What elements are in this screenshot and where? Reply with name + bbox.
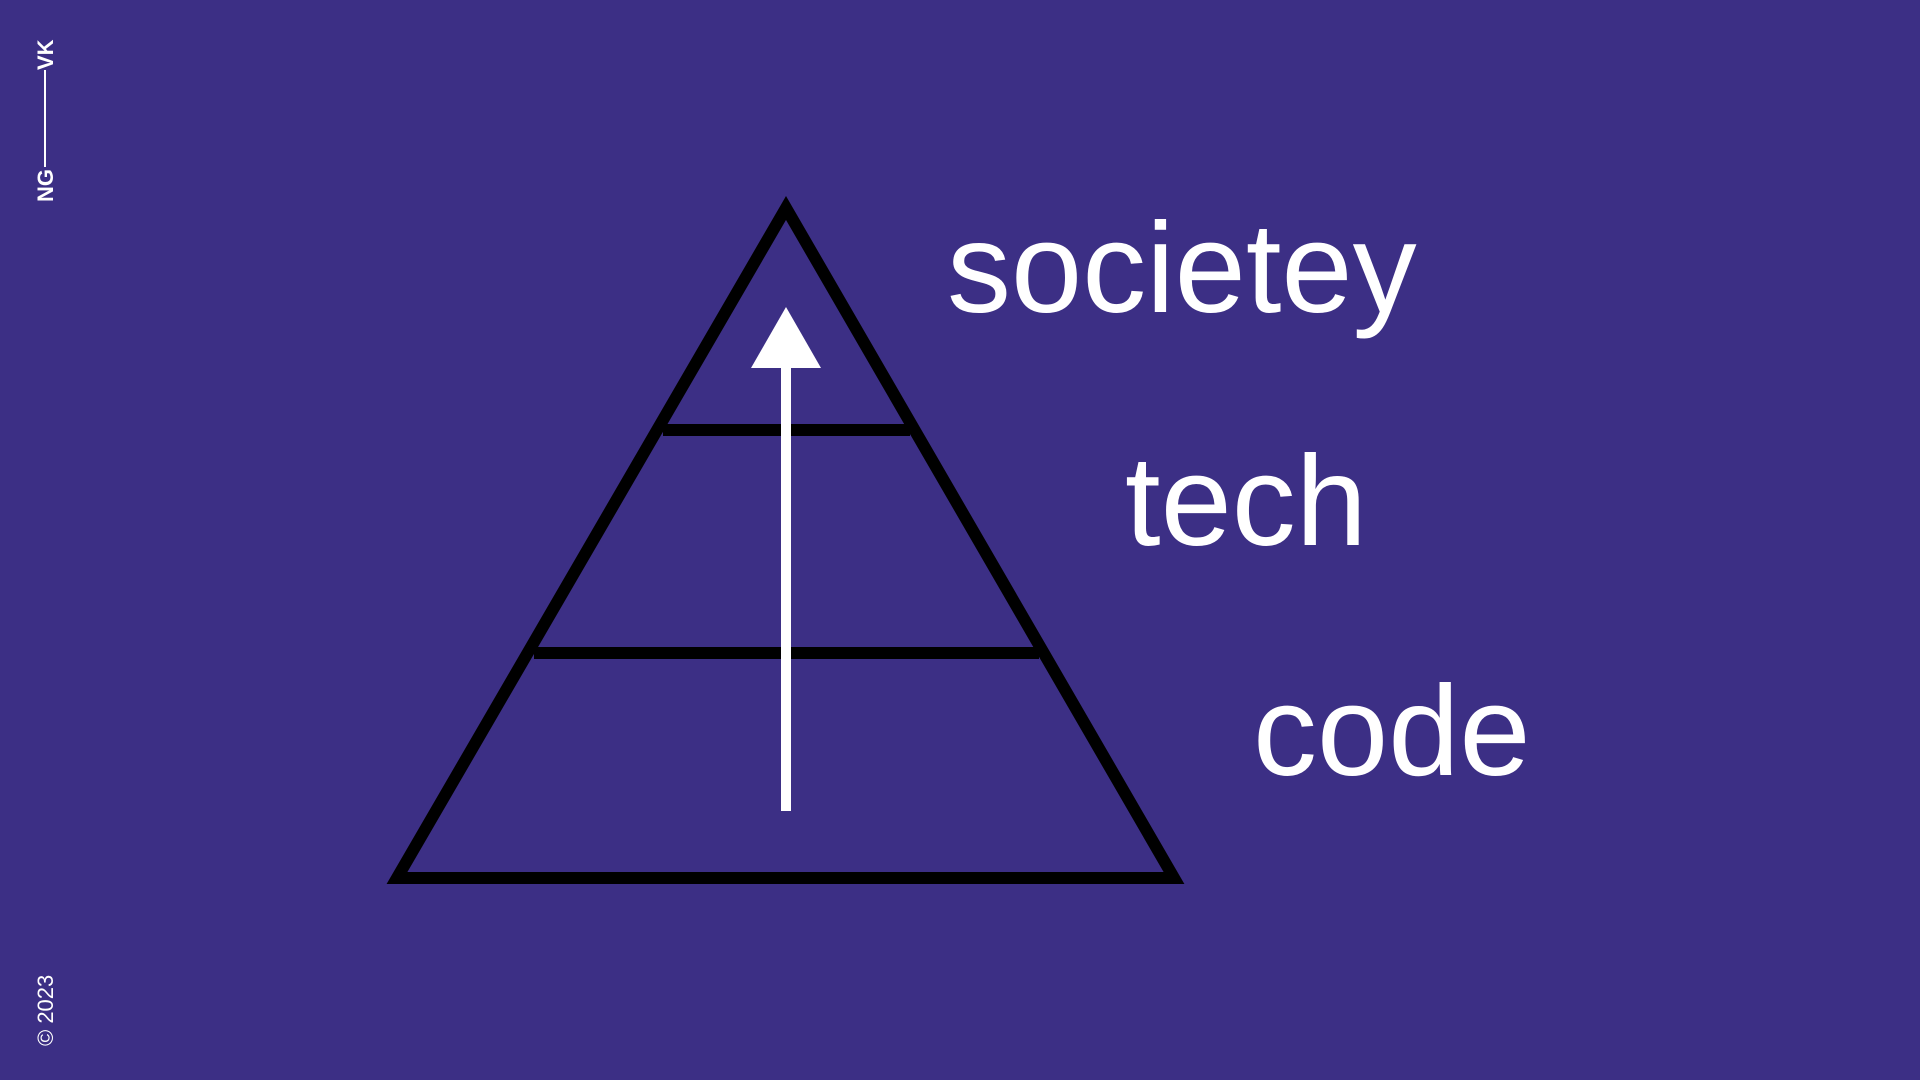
side label: NG—VK: NG [33,169,58,202]
side label: NG—VK [33,39,58,202]
label: tech: tech [1125,430,1367,573]
pyramid [397,208,1174,878]
copyright: © 2023 [33,975,58,1046]
label: societey: societey [947,197,1417,340]
arrow: upward [751,307,821,811]
label: code: code [1253,660,1531,803]
side label: NG—VK: VK [33,39,58,70]
